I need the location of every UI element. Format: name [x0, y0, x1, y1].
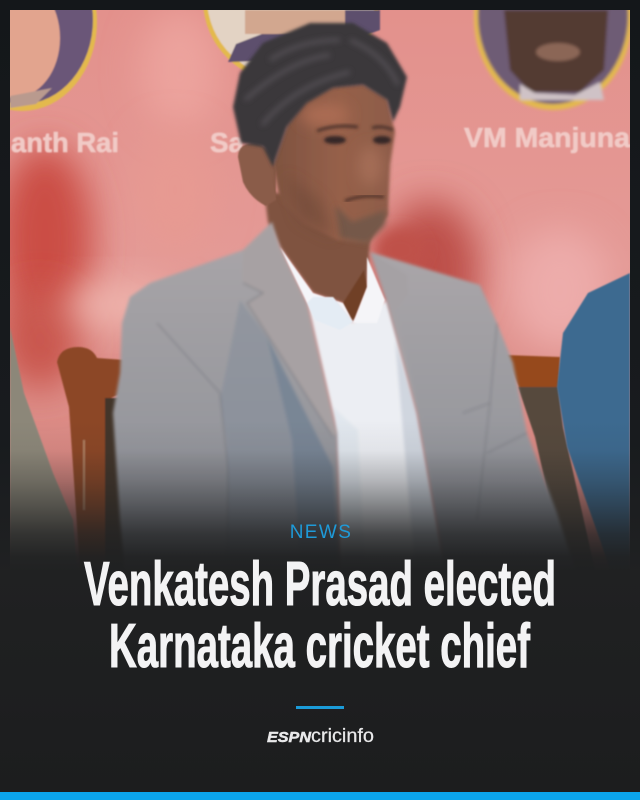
- wooden chair right: [508, 354, 590, 552]
- white shirt: [307, 300, 438, 552]
- right portrait medallion: [474, 0, 632, 110]
- pink event backdrop: [0, 10, 630, 570]
- dark caption panel: [0, 570, 640, 792]
- forehead highlight: [301, 103, 349, 127]
- backdrop name labels: anth Rai: [11, 127, 119, 158]
- backdrop name labels: VM Manjuna: [464, 122, 630, 153]
- person at left edge: [10, 328, 74, 544]
- hair: [233, 23, 407, 167]
- backdrop name labels: [10, 126, 630, 154]
- neck: [264, 190, 378, 322]
- person at right edge: [557, 273, 630, 570]
- grey suit jacket: [113, 222, 575, 570]
- left portrait medallion: [10, 10, 98, 112]
- nose highlight: [358, 146, 382, 186]
- wooden chair left: [56, 346, 122, 552]
- lower face stubble: [335, 205, 386, 243]
- photo of Venkatesh Prasad at a press event: [0, 0, 640, 572]
- dark gradient overlay: [10, 444, 630, 570]
- jacket lapel left: [274, 338, 336, 436]
- ESPN wordmark: ESPN: [267, 729, 312, 746]
- face: [273, 84, 395, 243]
- centre portrait medallion: [203, 10, 381, 70]
- ear: [238, 143, 276, 206]
- open shirt collar: [280, 247, 385, 330]
- jacket seams: [158, 284, 498, 435]
- cricinfo wordmark: cricinfo: [311, 726, 374, 747]
- mouth: [345, 196, 384, 201]
- eyes: [317, 126, 393, 144]
- blue divider rule: [296, 706, 344, 709]
- Venkatesh Prasad figure: [113, 23, 575, 570]
- ESPNcricinfo logo: [267, 726, 374, 747]
- shadow on neck: [343, 270, 367, 322]
- blue footer bar: [0, 792, 640, 800]
- jacket lapel right: [370, 252, 420, 420]
- backdrop name labels: Sa: [210, 127, 244, 158]
- hair highlights: [245, 40, 398, 125]
- jacket shadow under left lapel: [222, 303, 292, 468]
- headline: [84, 550, 556, 681]
- jaw shadow: [294, 188, 331, 232]
- category label: NEWS: NEWS: [290, 522, 352, 543]
